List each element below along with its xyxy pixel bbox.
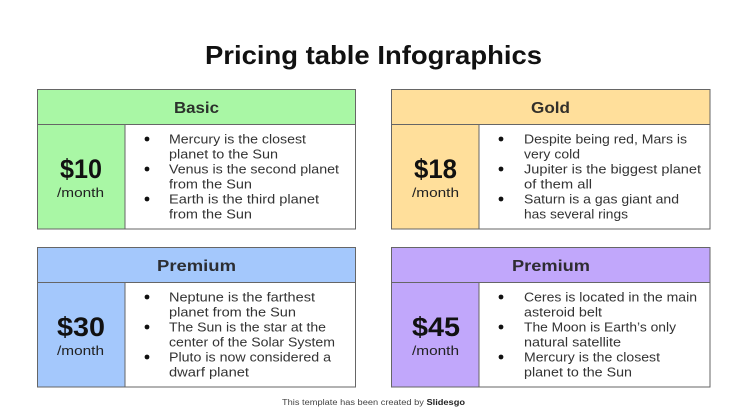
feature list: premium purple: planet to the Sun <box>524 366 632 380</box>
price: $10 per month: /month <box>57 186 104 200</box>
feature list: basic: from the Sun <box>169 208 252 222</box>
price: $30 per month <box>38 282 125 387</box>
feature list: premium blue: Pluto is now considered a <box>169 350 331 364</box>
price: $18 per month <box>392 124 479 229</box>
feature list: premium blue: dwarf planet <box>169 366 250 380</box>
feature list: basic: Earth is the third planet <box>169 192 320 206</box>
feature list: basic: from the Sun <box>169 178 252 192</box>
feature list: premium blue <box>145 290 335 380</box>
feature list: gold: Jupiter is the biggest planet <box>524 162 702 176</box>
title: Pricing table Infographics <box>205 40 542 70</box>
price: $30 per month: $30 <box>57 312 105 342</box>
feature list: premium purple: The Moon is Earth’s only <box>524 320 677 334</box>
feature list: gold: of them all <box>524 178 592 192</box>
panel: gold plan <box>392 90 710 229</box>
feature list: premium purple: asteroid belt <box>524 306 603 320</box>
price: $45 per month: /month <box>412 344 459 358</box>
feature list: basic: Venus is the second planet <box>169 162 340 176</box>
feature list: basic: planet to the Sun <box>169 148 278 162</box>
feature list: premium purple: natural satellite <box>524 336 621 350</box>
price: $10 per month <box>38 124 125 229</box>
header: Premium purple <box>392 248 710 282</box>
header: Premium blue <box>38 248 356 282</box>
price: $30 per month: /month <box>57 344 104 358</box>
feature list: premium blue: planet from the Sun <box>169 306 296 320</box>
header: Basic <box>38 90 356 124</box>
feature list: premium blue: Neptune is the farthest <box>169 290 316 304</box>
feature list: gold <box>499 132 702 222</box>
feature list: basic: Mercury is the closest <box>169 132 307 146</box>
feature list: gold: Despite being red, Mars is <box>524 132 687 146</box>
price: $10 per month: $10 <box>60 154 102 184</box>
feature list: premium purple <box>499 290 697 380</box>
feature list: premium purple: Mercury is the closest <box>524 350 661 364</box>
feature list: premium blue: The Sun is the star at the <box>169 320 326 334</box>
price: $45 per month <box>392 282 479 387</box>
feature list: basic <box>145 132 340 222</box>
header: Gold <box>392 90 710 124</box>
header: Premium purple: Premium <box>512 258 590 275</box>
feature list: gold: very cold <box>524 148 580 162</box>
header: Premium blue: Premium <box>157 258 236 275</box>
panel: basic plan <box>38 90 356 229</box>
price: $18 per month: /month <box>412 186 459 200</box>
feature list: premium purple: Ceres is located in the main <box>524 290 697 304</box>
feature list: gold: has several rings <box>524 208 628 222</box>
price: $18 per month: $18 <box>414 154 457 184</box>
feature list: premium blue: center of the Solar System <box>169 336 335 350</box>
price: $45 per month: $45 <box>412 312 460 342</box>
header: Basic: Basic <box>174 100 219 117</box>
feature list: gold: Saturn is a gas giant and <box>524 192 679 206</box>
header: Gold: Gold <box>531 100 570 117</box>
footer credit: This template has been created by Slidesgo <box>282 398 465 407</box>
panel: premium plan blue <box>38 248 356 387</box>
panel: premium plan purple <box>392 248 710 387</box>
